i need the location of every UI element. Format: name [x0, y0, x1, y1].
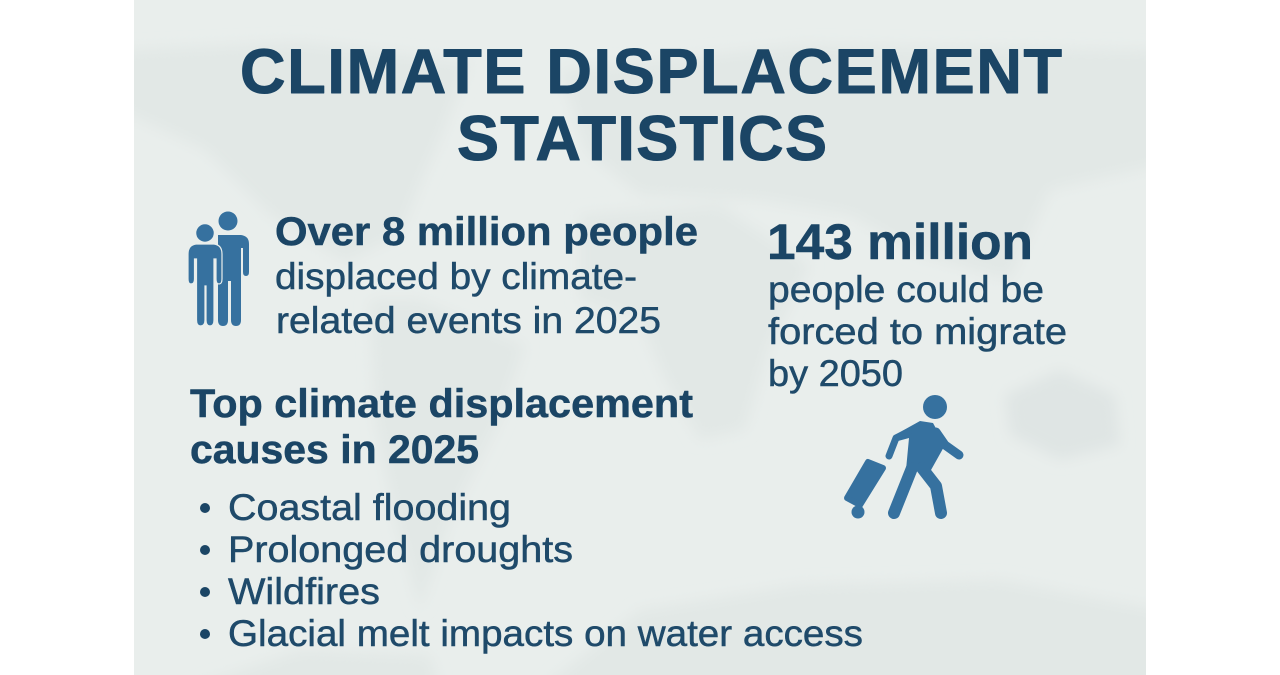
title: [240, 37, 1062, 174]
stat: 143 million: 143 million: [767, 214, 1033, 270]
stat: over 8 million: displaced by climate-: [275, 256, 637, 297]
title: CLIMATE DISPLACEMENT: [240, 37, 1062, 107]
heading: top causes: [190, 382, 693, 472]
stat: over 8 million: related events in 2025: [276, 300, 661, 341]
stat: 143 million: [767, 214, 1067, 394]
bullet list: causes: Glacial melt impacts on water access: [228, 613, 863, 654]
bullet list: causes: Coastal flooding: [228, 487, 511, 528]
bullet list: causes: Wildfires: [228, 571, 380, 612]
faint world map backdrop: [1012, 379, 1112, 452]
icon: two people: [188, 212, 249, 326]
bullet list: causes: Prolonged droughts: [228, 529, 573, 570]
heading: top causes: Top climate displacement: [190, 382, 693, 426]
stat: 143 million: forced to migrate: [768, 311, 1067, 352]
stat: over 8 million: Over 8 million people: [275, 210, 698, 254]
title: STATISTICS: [457, 104, 827, 174]
icon: walking person with suitcase: [847, 395, 959, 518]
infographic canvas: [134, 0, 1146, 675]
stat: 143 million: by 2050: [768, 353, 903, 394]
stat: over 8 million: [275, 210, 698, 341]
heading: top causes: causes in 2025: [190, 428, 479, 472]
bullet list: causes: [200, 487, 863, 654]
background panel: [134, 0, 1146, 675]
stat: 143 million: people could be: [768, 269, 1044, 310]
